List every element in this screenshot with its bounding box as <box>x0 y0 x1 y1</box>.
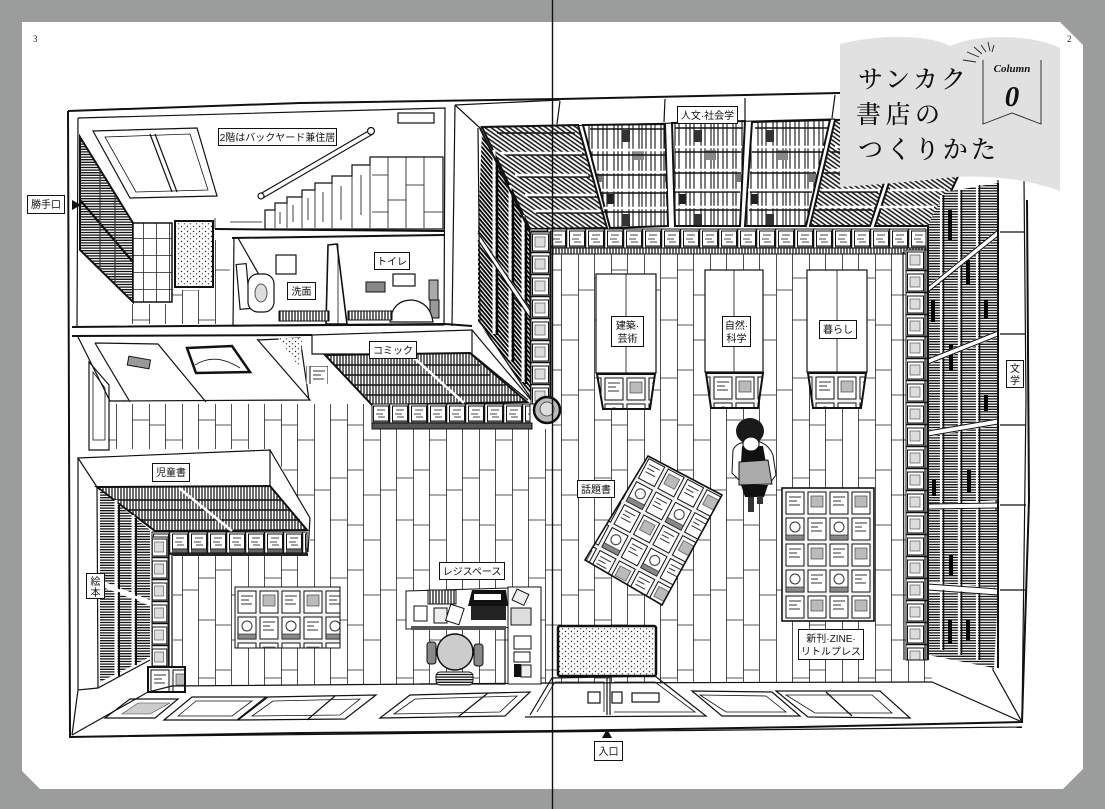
title panel: open book <box>840 37 1060 191</box>
flat table: nature <box>705 270 763 408</box>
building outer walls <box>68 93 1029 737</box>
main shop floor, right side <box>553 250 932 684</box>
label: literature <box>1006 360 1024 388</box>
upper left: skylight window <box>93 128 217 198</box>
label: toilet: トイレ <box>377 257 407 268</box>
label: washroom <box>288 282 316 300</box>
column ribbon badge: Column <box>994 63 1030 75</box>
face-out books along the back wall <box>530 229 926 254</box>
register space <box>406 587 541 685</box>
page number 2: 2 <box>1067 34 1072 44</box>
label: nature and science: 科学 <box>726 332 746 345</box>
page number 3: 3 <box>33 34 38 44</box>
entrance floor band and windows <box>72 676 1022 735</box>
low picture book table <box>235 587 340 648</box>
entrance doormat <box>558 626 656 676</box>
title line 2: 書店の <box>856 101 940 129</box>
comics shelf structure <box>312 330 532 429</box>
label: entrance: 入口 <box>598 747 618 758</box>
label: nature and science: 自然· <box>725 319 748 332</box>
title line 1: サンカク <box>858 67 966 94</box>
arrow: back door <box>72 200 81 210</box>
label: picture books: 本 <box>90 586 100 599</box>
label: lifestyle: 暮らし <box>823 323 853 336</box>
upper left: tiled floor <box>133 223 172 302</box>
label: second floor: 2階はバックヤード兼住居 <box>220 131 335 144</box>
label: new and small press: リトルプレス <box>801 646 861 658</box>
column ribbon badge: 0 <box>1005 81 1019 113</box>
label: humanities <box>678 106 738 124</box>
upper left: doormat <box>175 221 213 287</box>
label: back door: 勝手口 <box>31 198 61 211</box>
column ribbon badge <box>963 42 1041 124</box>
label: back door <box>28 196 64 214</box>
label: comics: コミック <box>373 345 413 357</box>
upper left: back door louvres <box>80 137 133 302</box>
label: register space <box>440 562 504 580</box>
label: children's books: 児童書 <box>156 466 186 479</box>
topical books table <box>585 456 722 605</box>
title line 3: つくりかた <box>858 137 996 164</box>
wash room and toilet <box>233 237 444 326</box>
label: entrance <box>594 742 622 760</box>
arrow: entrance <box>602 729 612 738</box>
right page <box>553 22 1083 789</box>
flat table: architecture <box>596 274 656 409</box>
left wall bookshelves of the right room <box>478 128 532 400</box>
picture book face-out column <box>152 537 173 667</box>
label: humanities: 人文·社会学 <box>681 109 734 122</box>
label: register space: レジスペース <box>443 567 501 578</box>
back wall bookshelves <box>482 118 985 229</box>
picture book wall shelf <box>72 458 150 735</box>
label: trending books: 話題書 <box>581 483 611 496</box>
label: trending books <box>578 480 614 498</box>
right wall bookshelves <box>928 183 998 668</box>
flat table: lifestyle <box>807 270 867 408</box>
label: new and small press <box>798 630 864 660</box>
label: picture books <box>86 574 104 599</box>
label: literature: 文 <box>1010 362 1020 375</box>
shopkeeper figure <box>732 418 776 512</box>
small book rack <box>148 667 185 692</box>
label: comics <box>370 342 416 358</box>
label: second floor <box>218 128 336 146</box>
side door <box>89 362 109 450</box>
label: toilet <box>374 252 410 270</box>
label: washroom: 洗面 <box>292 286 312 298</box>
label: nature and science <box>722 316 750 346</box>
face-out books column, right <box>903 250 927 660</box>
round stool <box>534 397 560 423</box>
label: architecture and art: 芸術 <box>618 332 638 345</box>
spine centre line <box>552 0 554 809</box>
upper left: plank floor <box>127 240 230 324</box>
label: children's books <box>152 464 190 482</box>
label: architecture and art: 建築· <box>616 319 639 332</box>
children's books shelf <box>78 450 310 556</box>
main shop floor, left side <box>108 404 552 686</box>
label: lifestyle <box>820 320 856 338</box>
label: picture books: 絵 <box>90 575 100 588</box>
new arrivals table <box>782 488 874 621</box>
left page <box>22 22 552 789</box>
label: literature: 学 <box>1010 374 1020 387</box>
label: architecture and art <box>612 316 644 346</box>
small floor mat <box>105 699 178 718</box>
face-out books column, left <box>531 232 551 404</box>
staircase and handrail <box>215 113 445 238</box>
middle room ceiling <box>78 337 328 402</box>
label: new and small press: 新刊·ZINE· <box>806 633 856 645</box>
